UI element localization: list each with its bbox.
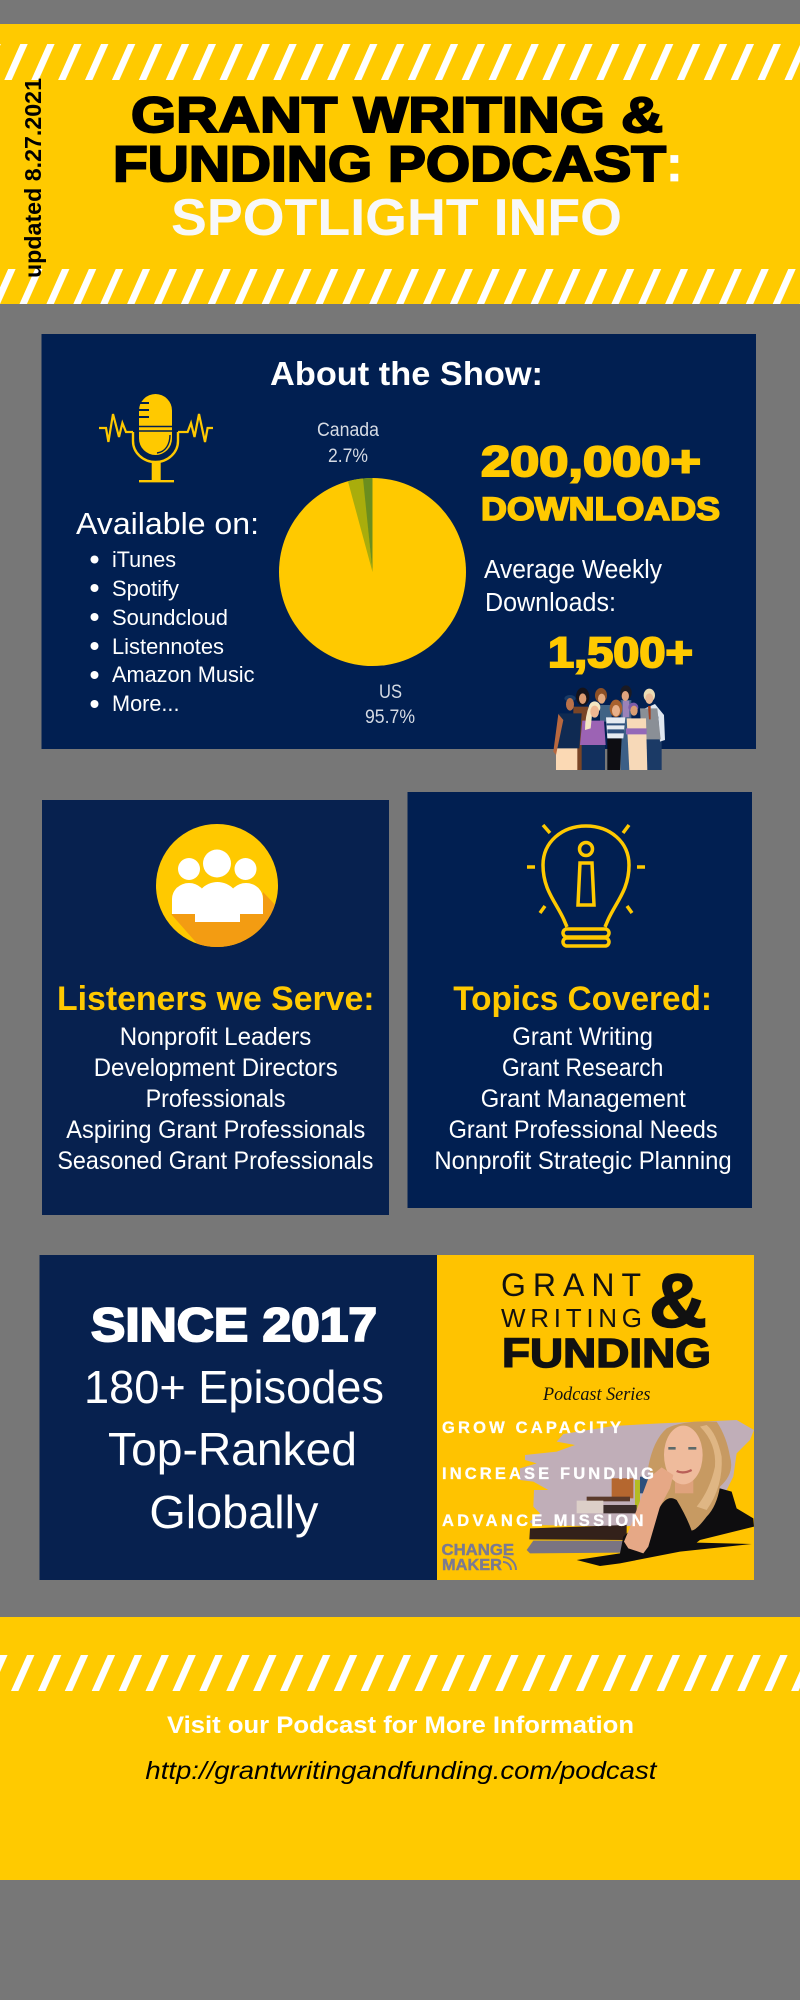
list: platforms: More... [112, 691, 180, 716]
stat: weekly downloads: 1,500+ [548, 629, 693, 677]
list: platforms: Listennotes [112, 634, 224, 659]
cover logo: change maker: CHANGE [442, 1542, 514, 1559]
text: listener list: Nonprofit Leaders [120, 1023, 311, 1051]
footer call to action: Visit our Podcast for More Information [167, 1712, 634, 1739]
pie label: US [365, 682, 415, 728]
heading: since 2017: SINCE 2017 [91, 1298, 377, 1351]
list: platforms: iTunes [112, 547, 176, 572]
text: listener list [57, 1023, 373, 1175]
text: episodes and ranking: Globally [149, 1486, 318, 1538]
pie label: Canada [317, 420, 379, 467]
stat: total downloads: 200,000+ [481, 438, 701, 486]
update date: updated 8.27.2021 [20, 78, 46, 278]
cover text: grant writing: WRITING [501, 1303, 642, 1333]
cover text: taglines: GROW CAPACITY [442, 1419, 621, 1437]
list: platforms [90, 547, 254, 716]
panel: about the show [42, 334, 756, 749]
list: platforms: Spotify [112, 576, 180, 601]
text: episodes and ranking: 180+ Episodes [84, 1361, 384, 1413]
subtitle: SPOTLIGHT INFO [171, 189, 622, 247]
title: GRANT WRITING & [131, 87, 663, 143]
pie label: Canada: 2.7% [328, 446, 368, 467]
text: listener list: Aspiring Grant Professionals [66, 1116, 365, 1144]
text: average weekly downloads [484, 556, 662, 617]
title: FUNDING PODCAST [113, 136, 666, 192]
icon: light bulb [527, 825, 645, 946]
cover text: grant writing: GRANT [501, 1267, 641, 1303]
cover logo: change maker [442, 1542, 516, 1574]
pie label: US: US [379, 682, 402, 703]
list: platforms: Soundcloud [112, 605, 228, 630]
cover text: grant writing: FUNDING [502, 1330, 711, 1376]
pie label: Canada: Canada [317, 420, 379, 441]
stat: total downloads: DOWNLOADS [481, 491, 720, 527]
footer banner [0, 1617, 800, 1880]
text: listener list: Professionals [146, 1085, 286, 1113]
text: listener list: Development Directors [94, 1054, 338, 1082]
text: episodes and ranking: Top-Ranked [108, 1423, 357, 1475]
text: topics list: Grant Management [481, 1085, 686, 1113]
panel: podcast cover art [437, 1255, 754, 1580]
cover text: taglines: INCREASE FUNDING [442, 1465, 654, 1483]
text: average weekly downloads: Downloads: [485, 589, 616, 617]
icon: listeners group [156, 824, 280, 950]
title: : [666, 136, 683, 192]
stat: total downloads [481, 438, 720, 527]
text: average weekly downloads: Average Weekly [484, 556, 662, 584]
icon: microphone [99, 394, 213, 482]
list: platforms: Amazon Music [112, 662, 254, 687]
panel: listeners we serve [42, 800, 389, 1215]
heading: about the show: About the Show: [270, 356, 543, 393]
header banner [0, 24, 800, 304]
footer url: http://grantwritingandfunding.com/podcast [145, 1757, 658, 1785]
title [113, 87, 683, 192]
text: listener list: Seasoned Grant Professionals [57, 1147, 373, 1175]
cover logo: change maker: MAKER [442, 1557, 502, 1574]
cover text: grant writing: & [649, 1259, 707, 1344]
text: episodes and ranking [84, 1361, 384, 1538]
pie label: US: 95.7% [365, 707, 415, 728]
text: topics list: Grant Research [502, 1054, 663, 1082]
cover illustration: host photo on brush strokes [520, 1420, 754, 1566]
cover text: grant writing [501, 1259, 711, 1376]
text: topics list [434, 1023, 732, 1175]
panel: since 2017 stats [40, 1255, 437, 1580]
cover text: taglines [442, 1419, 654, 1530]
text: topics list: Grant Writing [512, 1023, 653, 1051]
illustration: group of people [553, 685, 665, 770]
text: topics list: Grant Professional Needs [449, 1116, 718, 1144]
cover text: taglines: ADVANCE MISSION [442, 1512, 644, 1530]
cover text: podcast series: Podcast Series [542, 1384, 650, 1405]
heading: topics covered: Topics Covered: [453, 980, 712, 1018]
heading: listeners we serve: Listeners we Serve: [57, 980, 374, 1018]
pie chart: downloads by country [279, 420, 466, 666]
panel: topics covered [408, 792, 752, 1208]
text: topics list: Nonprofit Strategic Planning [434, 1147, 732, 1175]
text: available on: Available on: [76, 506, 259, 541]
